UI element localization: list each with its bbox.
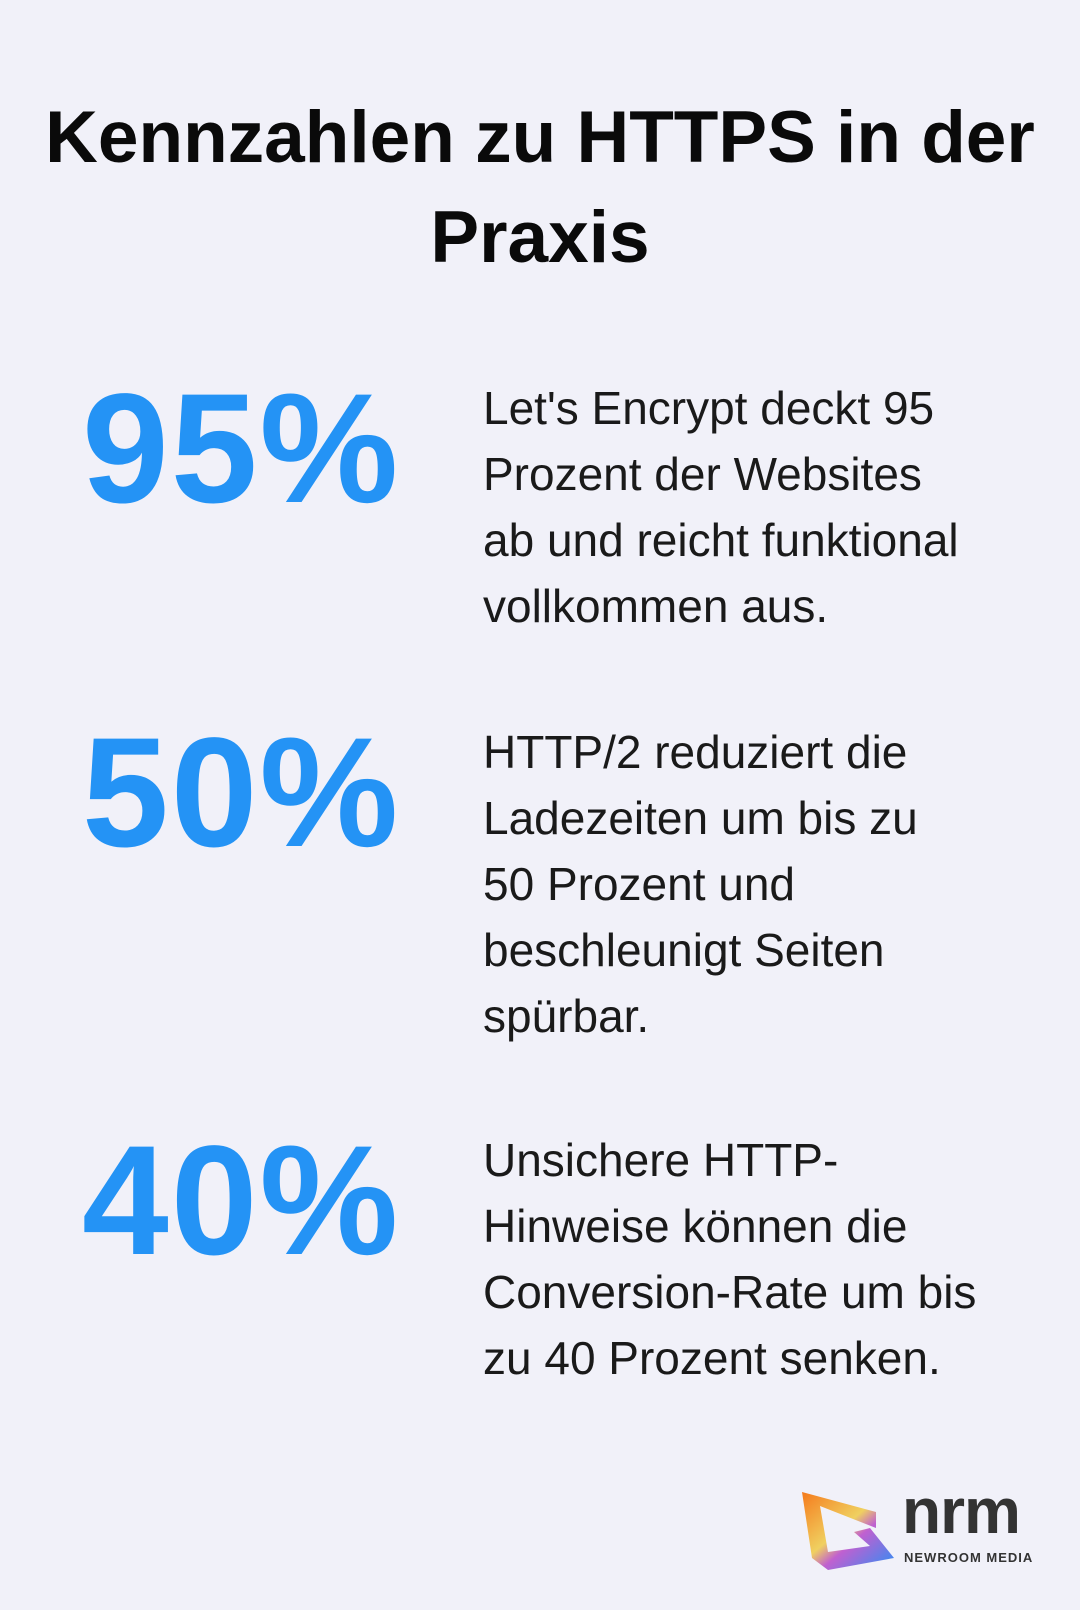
text: 50%: 50 Prozent und <box>483 858 795 910</box>
text: 40%: Unsichere HTTP- <box>483 1134 838 1186</box>
logo <box>802 1475 1033 1570</box>
text: 50%: Ladezeiten um bis zu <box>483 792 918 844</box>
text: 50% <box>483 726 918 1042</box>
text: 95%: ab und reicht funktional <box>483 514 959 566</box>
text: 50%: HTTP/2 reduziert die <box>483 726 907 778</box>
title <box>45 97 1035 278</box>
title: Kennzahlen zu HTTPS in der <box>45 97 1035 178</box>
text: 50%: beschleunigt Seiten <box>483 924 885 976</box>
text: 40%: zu 40 Prozent senken. <box>483 1332 941 1384</box>
text: 95%: Let's Encrypt deckt 95 <box>483 382 934 434</box>
logo subtitle: NEWROOM MEDIA <box>904 1550 1033 1565</box>
text: 95%: vollkommen aus. <box>483 580 828 632</box>
icon: logo mark <box>802 1492 894 1570</box>
logo text: nrm <box>902 1475 1020 1547</box>
text: 40%: Hinweise können die <box>483 1200 908 1252</box>
title: Praxis <box>430 197 650 278</box>
text: 95%: Prozent der Websites <box>483 448 922 500</box>
text: 40%: Conversion-Rate um bis <box>483 1266 976 1318</box>
stat: 50%: 50% <box>82 706 400 880</box>
text: 40% <box>483 1134 976 1384</box>
stat: 40%: 40% <box>82 1114 400 1288</box>
text: 50%: spürbar. <box>483 990 649 1042</box>
stat: 95%: 95% <box>82 362 400 536</box>
text: 95% <box>483 382 959 632</box>
